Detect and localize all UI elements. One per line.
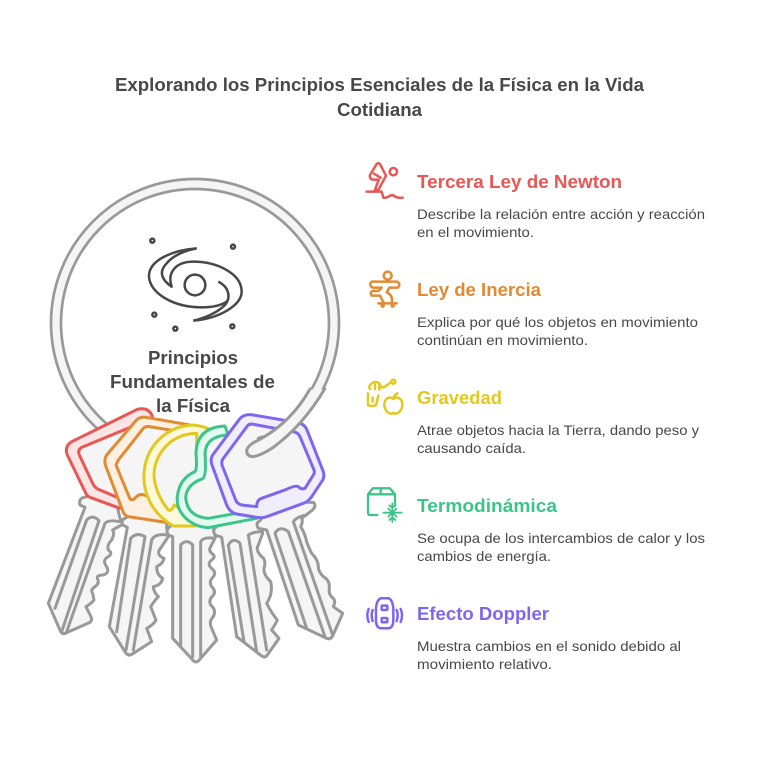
item: Ley de Inercia xyxy=(370,272,698,348)
item: Efecto Doppler: Efecto Doppler xyxy=(417,604,549,624)
item: Tercera Ley de Newton: en el movimiento. xyxy=(417,224,534,240)
item: Efecto Doppler xyxy=(367,598,681,672)
tag: orange xyxy=(105,417,190,525)
item: Termodinámica xyxy=(368,488,705,564)
item: Tercera Ley de Newton: Tercera Ley de Newton xyxy=(417,172,622,192)
ring tail through purple tag xyxy=(247,389,325,457)
icon: frozen box xyxy=(368,488,402,522)
icon: car with sound waves xyxy=(367,598,402,628)
central label: Fundamentales de xyxy=(110,372,275,392)
icon: skater xyxy=(370,272,399,307)
keys illustration xyxy=(48,389,343,662)
title xyxy=(115,75,645,120)
key 5 xyxy=(257,500,343,639)
item: Termodinámica: cambios de energía. xyxy=(417,548,551,564)
key 3 xyxy=(167,513,217,662)
central label: Principios xyxy=(148,348,238,368)
item: Efecto Doppler: movimiento relativo. xyxy=(417,656,552,672)
key 1 xyxy=(48,490,122,634)
key blades xyxy=(48,490,343,662)
item: Efecto Doppler: Muestra cambios en el sonido debido al xyxy=(417,638,681,654)
icon: diver xyxy=(367,163,403,198)
item: Ley de Inercia: Explica por qué los objetos en movimiento xyxy=(417,314,698,330)
item: Gravedad: Atrae objetos hacia la Tierra, dando peso y xyxy=(417,422,699,438)
item: Ley de Inercia: Ley de Inercia xyxy=(417,280,542,300)
tag: red xyxy=(66,409,152,508)
item: Ley de Inercia: continúan en movimiento. xyxy=(417,332,588,348)
title: Cotidiana xyxy=(337,100,423,120)
item: Tercera Ley de Newton xyxy=(367,163,705,240)
icon: hand and apple xyxy=(368,380,402,414)
tag: purple xyxy=(211,415,324,518)
tag: green xyxy=(177,426,257,527)
item: Tercera Ley de Newton: Describe la relación entre acción y reacción xyxy=(417,206,705,222)
item: Gravedad: Gravedad xyxy=(417,388,502,408)
icon: galaxy xyxy=(149,239,242,331)
key 2 xyxy=(109,510,169,655)
key 4 xyxy=(214,513,279,657)
title: Explorando los Principios Esenciales de la Física en la Vida xyxy=(115,75,645,95)
central label xyxy=(110,348,275,416)
tag: yellow xyxy=(144,425,239,526)
item: Gravedad xyxy=(368,380,699,456)
item: Termodinámica: Termodinámica xyxy=(417,496,558,516)
item: Termodinámica: Se ocupa de los intercambios de calor y los xyxy=(417,530,705,546)
keyring ring xyxy=(51,179,339,467)
central label: la Física xyxy=(156,396,231,416)
item: Gravedad: causando caída. xyxy=(417,440,526,456)
